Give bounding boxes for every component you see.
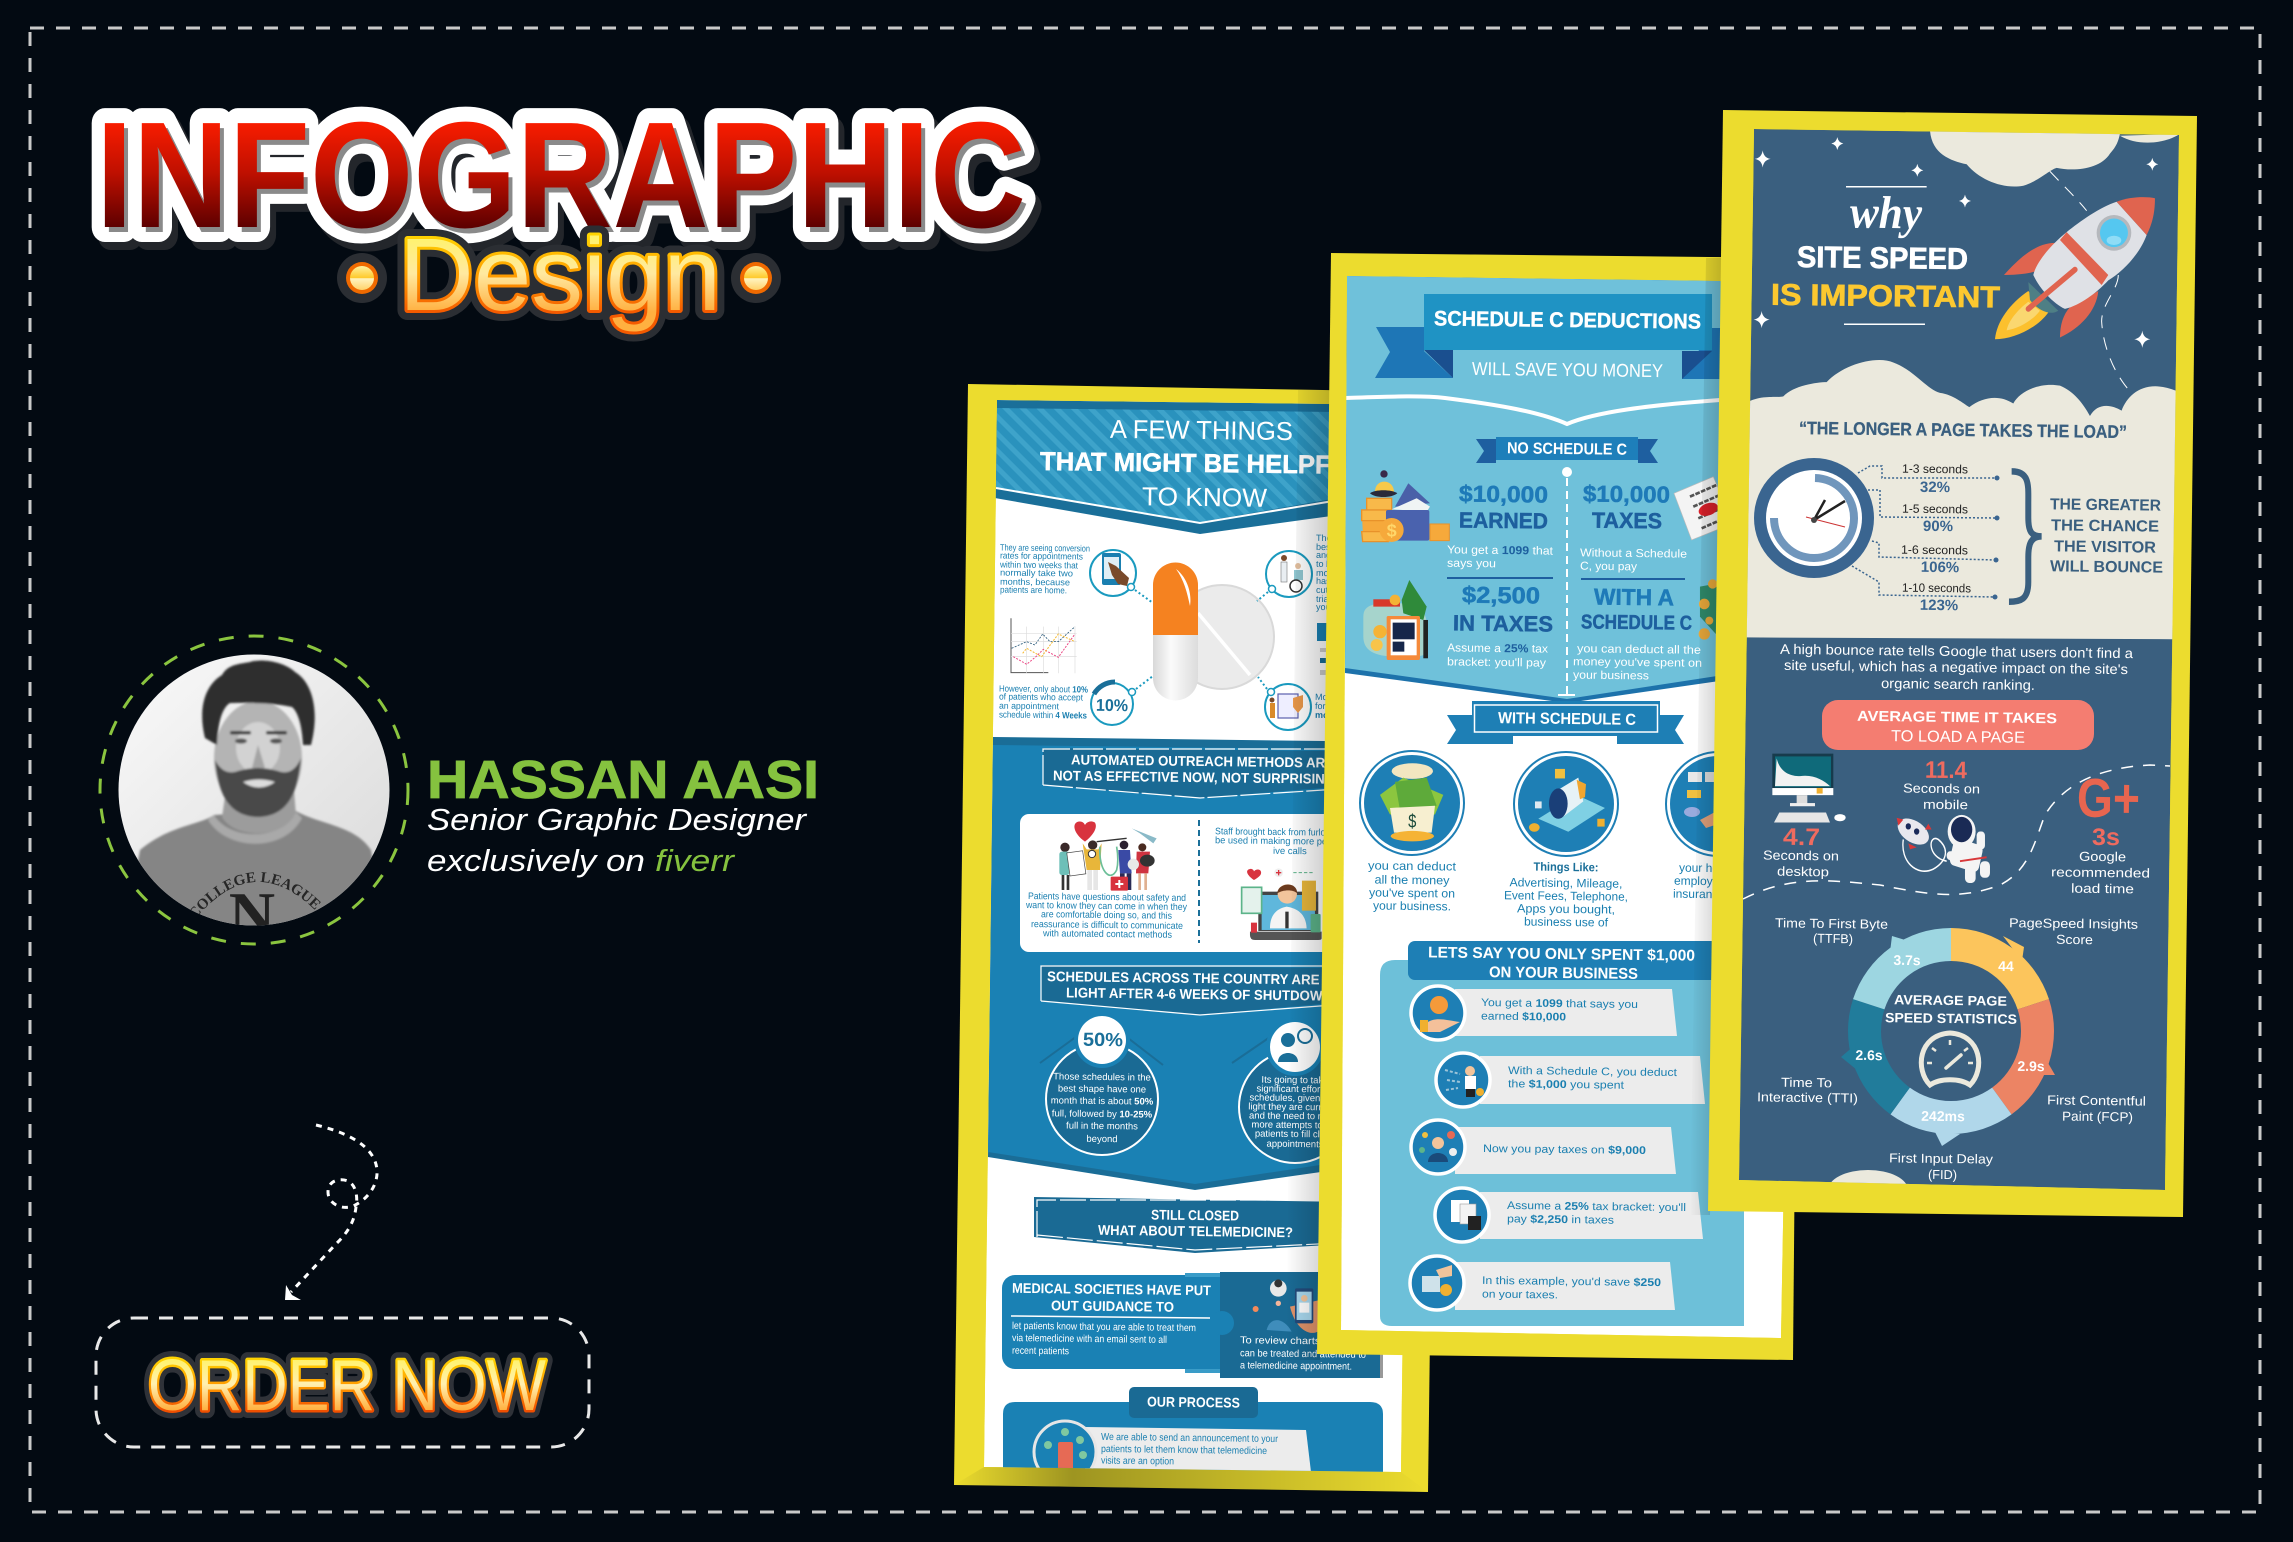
stat circle: significant effort: more attempts to get: [1251, 1119, 1339, 1132]
donut labels: Time To First Byte: [1775, 915, 1888, 932]
callout: average time: [1822, 700, 2094, 750]
line chart: [1011, 618, 1077, 673]
bounce rate list: 1-5 seconds: [1902, 502, 1968, 516]
circle: things like: Advertising, Mileage,: [1509, 875, 1623, 891]
text: ten percent: an appointment: [999, 701, 1060, 711]
step five: In this example, you'd save $250: [1482, 1275, 1661, 1289]
banner: schedules across the country: SCHEDULES ACROSS THE COUNTRY ARE VERY: [1047, 968, 1360, 988]
text: conversion rates: normally take two: [1000, 568, 1073, 578]
banner: automated outreach: AUTOMATED OUTREACH METHODS ARE: [1071, 751, 1334, 771]
circle: things like: Apps you bought,: [1517, 901, 1615, 917]
text: conversion rates: within two weeks that: [999, 560, 1079, 570]
icon: tax newspaper: [1674, 476, 1718, 540]
card: patient questions: ive calls: [1273, 846, 1307, 857]
icon: green plant coins: [1699, 579, 1718, 640]
stat: google: load time: [2071, 881, 2134, 896]
icon: jar of money: [1363, 580, 1428, 660]
donut chart: average page speed statistics: AVERAGE PAGE: [1894, 992, 2007, 1009]
stat: desktop: desktop: [1777, 864, 1829, 879]
column: with schedule c: C, you pay: [1580, 561, 1637, 573]
profile photo: [98, 634, 410, 946]
order now button: [96, 1318, 589, 1447]
stat circle: significant effort: Its going to take: [1261, 1075, 1329, 1086]
circle: things like: Event Fees, Telephone,: [1504, 888, 1628, 904]
ribbon: no schedule c: [1476, 437, 1658, 463]
designer name: HASSAN AASI: [427, 750, 819, 810]
text: high bounce rate: site useful, which has a negative impact on the site's: [1784, 657, 2128, 677]
text: conversion rates: [999, 542, 1090, 595]
tab: our process: OUR PROCESS: [1147, 1393, 1240, 1411]
stat circle: significant effort: appointments: [1266, 1139, 1324, 1150]
heading: why site speed is important: SITE SPEED: [1797, 241, 1968, 276]
stat: mobile: [1903, 757, 1980, 812]
circle: deduct money: you can deduct: [1368, 858, 1457, 874]
quote heading: “THE LONGER A PAGE TAKES THE LOAD”: [1799, 418, 2127, 442]
icon: medical documents circle: [1258, 677, 1311, 730]
donut labels: First Input Delay: [1889, 1150, 1994, 1167]
text: conversion rates: They are seeing conversion: [1000, 542, 1090, 554]
card: medical societies: To review charts for who: [1240, 1335, 1361, 1348]
column: no schedule c earned: IN TAXES: [1453, 610, 1553, 637]
stat: google: 3s: [2092, 824, 2120, 851]
column: with schedule c: money you've spent on: [1573, 656, 1702, 670]
blue section: [988, 737, 1325, 1190]
clock icon: [1754, 458, 1874, 578]
text: clipped right column: has: [1316, 576, 1331, 586]
text: clipped right column: you: [1316, 602, 1331, 612]
bounce rate list: [1852, 462, 2000, 614]
icon: ten percent ring: [1091, 676, 1153, 725]
text: clipped right column: Mos: [1315, 692, 1333, 702]
step two: the $1,000 you spent: [1508, 1078, 1624, 1092]
text: the greater the chance: THE CHANCE: [2051, 517, 2159, 536]
text: high bounce rate: [1780, 641, 2133, 693]
text: clipped right column: mon: [1316, 568, 1334, 578]
illustration: doctor on laptop: [1242, 868, 1322, 940]
shadow cast by the right sheet: [1690, 258, 1726, 1215]
stat: google: [2051, 767, 2150, 896]
bounce rate list: 32%: [1920, 479, 1950, 496]
heading: why site speed is important: [1771, 187, 2000, 314]
stat: desktop: Seconds on: [1763, 848, 1839, 863]
text: clipped right column: cut: [1316, 585, 1329, 595]
column: with schedule c: you can deduct all the: [1577, 643, 1701, 657]
stat circle: fifty percent: month that is about 50%: [1051, 1095, 1154, 1108]
stat: desktop: 4.7: [1783, 824, 1820, 851]
step five: [1410, 1256, 1675, 1310]
dashed divider: [1743, 765, 2170, 899]
stat circle: fifty percent: 50%: [1083, 1030, 1123, 1051]
arrow: dashed loop pointing to the order button: [285, 1125, 377, 1300]
column: with schedule c: TAXES: [1592, 508, 1662, 533]
icon: coins and wallet: $: [1387, 521, 1397, 541]
bounce rate list: 90%: [1923, 518, 1953, 535]
illustration: phone in hand: [1253, 1279, 1320, 1333]
profile photo: COLLEGE LEAGUE: [190, 872, 321, 914]
order now button: ORDER NOW: [148, 1346, 546, 1426]
title: INFOGRAPHIC: INFOGRAPHIC: [100, 95, 1030, 264]
circle: deduct money: $: [1408, 811, 1417, 832]
panel: medical infographic (left sheet): [954, 384, 1442, 1492]
step four: [1435, 1188, 1703, 1242]
donut labels: (TTFB): [1813, 931, 1853, 946]
card: medical societies: a telemedicine appointment.: [1240, 1360, 1352, 1373]
text: the greater the chance: THE VISITOR: [2054, 538, 2157, 557]
ribbon: with schedule c: [1447, 701, 1684, 744]
clouds, stars and rocket: [1745, 130, 2180, 639]
panel: lets say you only spent: [1380, 941, 1748, 1326]
stat circle: fifty percent: full in the months: [1066, 1121, 1138, 1132]
text: ten percent: However, only about 10%: [999, 683, 1088, 695]
card: medical societies: [1002, 1272, 1383, 1378]
step three: Now you pay taxes on $9,000: [1483, 1143, 1646, 1157]
banner: still closed: WHAT ABOUT TELEMEDICINE?: [1098, 1222, 1293, 1240]
card: patient questions: want to know they can come in when they: [1025, 900, 1187, 913]
center dashed connector: [1558, 467, 1575, 695]
banner: schedule c deductions: SCHEDULE C DEDUCTIONS: [1434, 307, 1701, 334]
process step: patients to let them know that telemedicine: [1101, 1444, 1267, 1457]
icon: coins and wallet: [1362, 470, 1449, 542]
designer role: exclusively on: [427, 843, 645, 878]
stat circle: significant effort: and the need to make: [1249, 1110, 1341, 1123]
text: clipped right column: best: [1316, 542, 1334, 552]
title: INFOGRAPHIC: INFOGRAPHIC: [96, 90, 1026, 259]
stat circle: fifty percent: Those schedules in the: [1053, 1071, 1151, 1084]
card: patient questions: [1020, 814, 1324, 952]
process step: [1032, 1420, 1311, 1471]
donut chart: average page speed statistics: 3.7s: [1893, 952, 1921, 968]
curly brace: [2009, 471, 2042, 602]
column: with schedule c: Without a Schedule: [1580, 547, 1687, 561]
card: medical societies: let patients know that you are able to treat them: [1012, 1321, 1196, 1334]
circle: things like: [1504, 752, 1628, 930]
column: with schedule c: SCHEDULE C: [1581, 611, 1692, 635]
donut labels: Interactive (TTI): [1757, 1089, 1858, 1106]
order now button: ORDER NOW: [148, 1346, 546, 1426]
stat: mobile: 11.4: [1925, 757, 1968, 784]
circle: employees: employee: [1674, 874, 1726, 888]
donut chart: average page speed statistics: 2.6s: [1855, 1047, 1883, 1063]
bounce rate list: 1-3 seconds: [1902, 462, 1968, 476]
heading: a few things: [1040, 420, 1328, 507]
heading: a few things: A FEW THINGS: [1110, 414, 1293, 446]
banner: automated outreach: [1042, 748, 1325, 799]
process step: visits are an option: [1101, 1456, 1174, 1467]
banner: still closed: STILL CLOSED: [1151, 1206, 1239, 1224]
illustration: medical team: [1059, 821, 1157, 891]
circle: deduct money: you've spent on: [1369, 885, 1455, 901]
banner: automated outreach: NOT AS EFFECTIVE NOW, NOT SURPRISING: [1053, 767, 1335, 787]
column: no schedule c earned: [1447, 480, 1554, 670]
stat circle: fifty percent: beyond: [1086, 1134, 1118, 1145]
ribbon: with schedule c: WITH SCHEDULE C: [1498, 710, 1637, 729]
icon: wheelchair circle: [1257, 551, 1312, 601]
step four: pay $2,250 in taxes: [1507, 1213, 1615, 1227]
text: clipped right column: They: [1316, 533, 1337, 543]
donut labels: (FID): [1928, 1167, 1957, 1182]
heading: a few things: TO KNOW: [1142, 481, 1268, 513]
header background: [1345, 276, 1721, 701]
circle: employees: [1666, 752, 1770, 901]
stat circle: significant effort: [1232, 1022, 1321, 1164]
heading: why site speed is important: IS IMPORTANT: [1771, 279, 2000, 314]
step four: Assume a 25% tax bracket: you'll: [1507, 1200, 1686, 1214]
shadow cast by the middle sheet: [1286, 390, 1332, 1360]
text: conversion rates: rates for appointments: [1000, 550, 1084, 562]
column: with schedule c: [1573, 480, 1702, 682]
donut chart: average page speed statistics: SPEED STATISTICS: [1885, 1010, 2017, 1027]
donut labels: First Contentful: [2047, 1092, 2146, 1109]
column: no schedule c earned: $10,000: [1459, 480, 1548, 508]
designer role: [427, 802, 808, 878]
donut chart: average page speed statistics: [1841, 928, 2055, 1146]
column: no schedule c earned: $2,500: [1462, 582, 1540, 608]
card: patient questions: are comfortable doing so, and this: [1041, 909, 1172, 922]
card: medical societies: MEDICAL SOCIETIES HAVE PUT: [1012, 1280, 1211, 1298]
card: patient questions: with automated contact methods: [1042, 928, 1172, 941]
stat: google: G+: [2077, 767, 2140, 829]
bounce rate list: 1-10 seconds: [1902, 581, 1971, 595]
title: INFOGRAPHIC: INFOGRAPHIC: [96, 90, 1026, 259]
heading: why site speed is important: why: [1850, 187, 1923, 238]
circle: deduct money: your business.: [1373, 899, 1451, 913]
column: no schedule c earned: bracket: you'll pay: [1447, 656, 1546, 670]
circle: things like: business use of: [1524, 914, 1609, 930]
column: with schedule c: $10,000: [1583, 480, 1670, 508]
donut chart: average page speed statistics: 242ms: [1921, 1108, 1965, 1124]
heading: a few things: THAT MIGHT BE HELPFUL: [1040, 446, 1365, 480]
callout: average time: AVERAGE TIME IT TAKES: [1857, 709, 2057, 727]
column: with schedule c: your business: [1573, 670, 1649, 682]
tab: our process: [1003, 1387, 1383, 1472]
panel: site speed infographic (right sheet): [1708, 110, 2197, 1217]
banner: schedules across the country: [1040, 965, 1322, 1016]
icon: speedometer: [1921, 1033, 1979, 1085]
banner: schedule c deductions: WILL SAVE YOU MONEY: [1472, 358, 1663, 381]
card: medical societies: recent patients: [1012, 1346, 1069, 1357]
title: INFOGRAPHIC: INFOGRAPHIC: [102, 98, 1032, 267]
subtitle: Design: Design: [399, 217, 721, 332]
callout: average time: TO LOAD A PAGE: [1891, 728, 2025, 747]
circle: deduct money: [1360, 751, 1464, 913]
stat: google: Google: [2079, 849, 2126, 864]
card: patient questions: be used in making more perso: [1215, 835, 1340, 848]
stat circle: significant effort: patients to fill close: [1255, 1129, 1335, 1140]
banner: schedule c deductions: [1375, 294, 1720, 379]
step one: earned $10,000: [1481, 1010, 1566, 1024]
stat circle: significant effort: schedules, given how: [1250, 1092, 1341, 1105]
card: patient questions: reassurance is difficult to communicate: [1031, 919, 1183, 932]
text: the greater the chance: WILL BOUNCE: [2050, 558, 2163, 577]
designer role: fiverr: [655, 843, 736, 878]
donut labels: Paint (FCP): [2062, 1109, 2133, 1124]
stat circle: significant effort: light they are currently: [1248, 1101, 1342, 1114]
stat: google: recommended: [2051, 864, 2150, 881]
circle: deduct money: all the money: [1374, 873, 1450, 887]
banner: still closed: [1034, 1197, 1319, 1253]
text: the greater the chance: [2050, 496, 2163, 577]
banner: schedules across the country: LIGHT AFTER 4-6 WEEKS OF SHUTDOWN: [1066, 984, 1332, 1004]
column: no schedule c earned: says you: [1447, 558, 1496, 570]
card: medical societies: OUT GUIDANCE TO: [1051, 1297, 1174, 1315]
bounce rate list: 1-6 seconds: [1901, 543, 1968, 557]
column: no schedule c earned: You get a 1099 that: [1447, 544, 1554, 558]
circle: employees: your home,: [1679, 861, 1739, 875]
donut labels: PageSpeed Insights: [2009, 915, 2139, 932]
text: clipped right column: to be: [1316, 559, 1336, 569]
card: patient questions: Patients have questions about safety and: [1028, 891, 1186, 904]
text: clipped right column: mor: [1315, 710, 1333, 720]
card: patient questions: Staff brought back from furlough: [1215, 826, 1340, 839]
bounce rate list: 123%: [1920, 597, 1958, 614]
donut chart: average page speed statistics: 2.9s: [2017, 1058, 2045, 1074]
column: no schedule c earned: EARNED: [1459, 507, 1548, 534]
stat: mobile: mobile: [1923, 797, 1968, 812]
order now button: ORDER NOW: [148, 1346, 546, 1426]
stat circle: fifty percent: [1040, 1012, 1163, 1155]
stat circle: significant effort: significant effort to: [1256, 1084, 1334, 1095]
icon: phone with hand: [1090, 550, 1153, 603]
circle: things like: Things Like:: [1533, 860, 1599, 874]
subtitle: Design: Design: [399, 217, 721, 332]
panel: lets say you only spent: LETS SAY YOU ONLY SPENT $1,000: [1428, 944, 1695, 965]
column: no schedule c earned: Assume a 25% tax: [1447, 642, 1548, 656]
text: ten percent: of patients who accept: [999, 691, 1084, 703]
icon: pill and capsule: [1153, 562, 1274, 700]
ribbon: no schedule c: NO SCHEDULE C: [1507, 440, 1628, 459]
step one: You get a 1099 that says you: [1481, 997, 1638, 1011]
text: clipped right column: ang: [1316, 550, 1331, 560]
icon: desktop computer: [1772, 754, 1846, 822]
icon: astronaut and rocket: [1894, 813, 1990, 883]
text: high bounce rate: organic search ranking.: [1881, 675, 2035, 693]
stat circle: fifty percent: full, followed by 10-25%: [1052, 1108, 1153, 1121]
bounce rate list: 106%: [1921, 559, 1959, 576]
designer role: Senior Graphic Designer: [427, 802, 808, 837]
profile photo: N: [229, 879, 275, 950]
donut chart: average page speed statistics: 44: [1998, 958, 2014, 974]
text: high bounce rate: A high bounce rate tells Google that users don't find a: [1780, 641, 2133, 661]
text: the greater the chance: THE GREATER: [2050, 496, 2162, 515]
text: clipped right column: trial: [1316, 594, 1331, 604]
header band: [996, 400, 1330, 534]
icon: ten percent ring: 10%: [1096, 696, 1128, 715]
stat circle: fifty percent: best shape have one: [1058, 1083, 1146, 1096]
text: clipped right column: [1315, 534, 1328, 718]
donut labels: [1757, 915, 2146, 1182]
circle: employees: insurance: [1673, 887, 1725, 901]
card: medical societies: can be treated and attended to: [1240, 1348, 1366, 1361]
stat: desktop: [1763, 824, 1839, 879]
process step: We are able to send an announcement to your: [1101, 1432, 1279, 1445]
text: conversion rates: patients are home.: [1000, 585, 1067, 595]
panel: lets say you only spent: ON YOUR BUSINESS: [1489, 964, 1638, 983]
step one: [1411, 986, 1677, 1040]
card: medical societies: via telemedicine with an email sent to all: [1012, 1333, 1167, 1346]
text: ten percent: [999, 683, 1088, 721]
text: ten percent: schedule within 4 Weeks: [999, 709, 1087, 721]
donut labels: Score: [2056, 932, 2093, 947]
column: with schedule c: WITH A: [1594, 584, 1674, 610]
step three: [1411, 1120, 1676, 1174]
step two: [1436, 1053, 1705, 1107]
panel: schedule c infographic (middle sheet): [1317, 253, 1803, 1360]
text: clipped right column: for: [1315, 701, 1326, 711]
step five: on your taxes.: [1482, 1289, 1558, 1301]
text: conversion rates: months, because: [1000, 577, 1070, 587]
step two: With a Schedule C, you deduct: [1508, 1065, 1677, 1079]
stat: mobile: Seconds on: [1903, 781, 1980, 796]
subtitle: Design: Design: [399, 217, 721, 332]
donut labels: Time To: [1781, 1075, 1832, 1090]
